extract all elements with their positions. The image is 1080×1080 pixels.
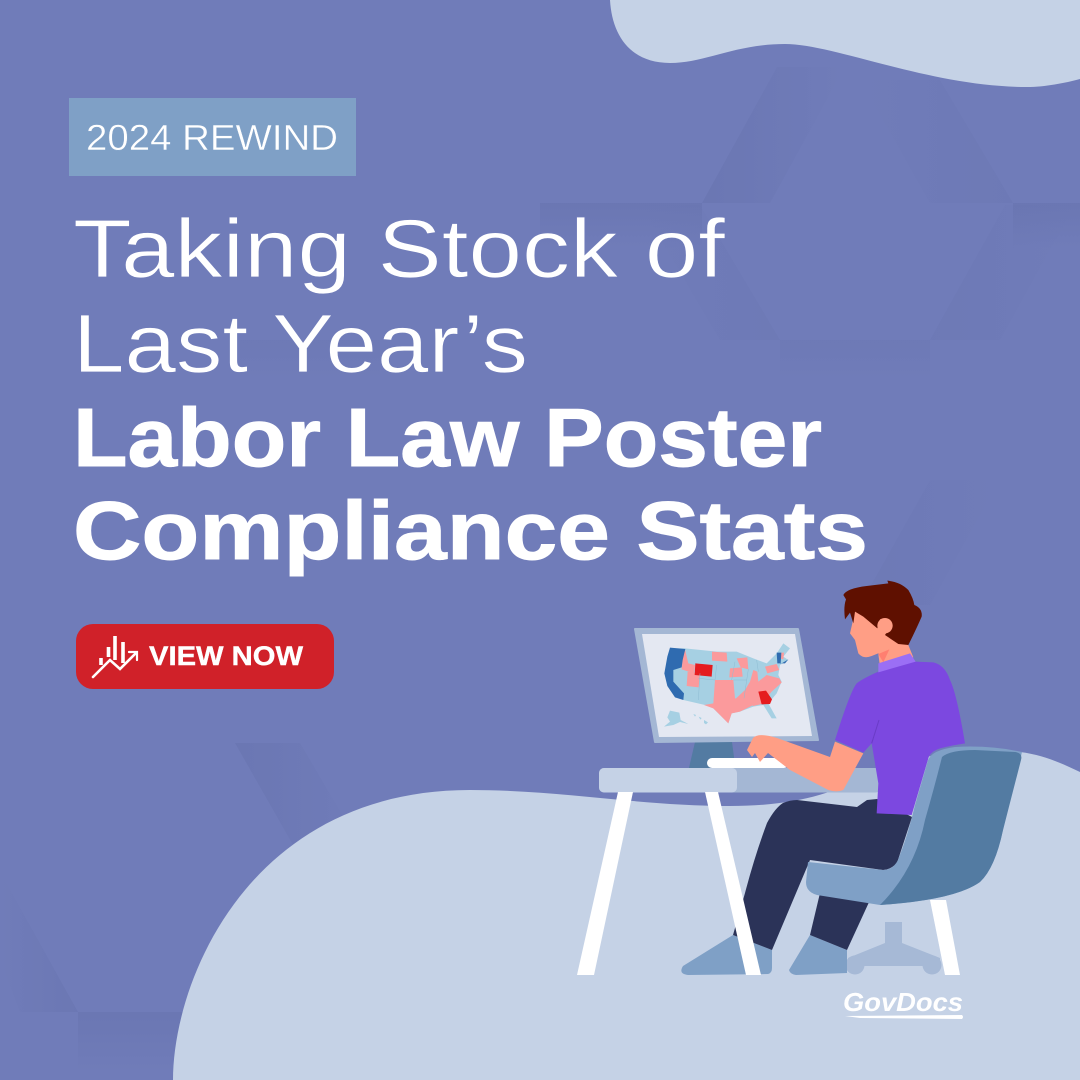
icon: rising bar chart — [93, 636, 137, 677]
illustration: person at desk — [577, 581, 1022, 975]
bottom blob — [173, 751, 1080, 1080]
person upper body — [747, 581, 965, 815]
left desk leg — [577, 792, 633, 975]
tag: 2024 rewind — [69, 98, 356, 176]
logo: GovDocs: GovDocs — [843, 987, 963, 1017]
neck — [878, 635, 913, 667]
arm and hand — [747, 735, 863, 791]
hair — [843, 581, 922, 645]
right desk leg — [705, 792, 761, 975]
desk — [599, 768, 881, 792]
chair — [806, 747, 1022, 905]
title: Last Year’s — [73, 297, 528, 390]
title: Labor Law Poster — [73, 391, 822, 484]
top right blob — [610, 0, 1080, 87]
back desk leg — [930, 900, 960, 975]
mainland states base — [665, 643, 790, 723]
dark blue states — [664, 648, 788, 700]
button: view now — [76, 624, 334, 689]
title: Taking Stock of — [73, 202, 726, 295]
monitor — [635, 629, 818, 742]
tag: 2024 rewind: 2024 REWIND — [86, 117, 338, 158]
chair base — [846, 922, 942, 974]
title: Compliance Stats — [73, 484, 868, 577]
keyboard — [707, 758, 789, 768]
alaska and hawaii — [664, 711, 708, 727]
shoes — [681, 935, 847, 975]
neck shadow — [878, 649, 889, 662]
torso — [835, 662, 965, 815]
shirt fold — [872, 720, 879, 743]
title — [73, 202, 868, 577]
ear — [877, 618, 893, 633]
collar — [878, 653, 916, 672]
red states — [695, 663, 772, 704]
pink states — [682, 649, 784, 723]
near leg and thigh — [733, 799, 912, 950]
state borders — [698, 660, 758, 700]
far leg — [810, 893, 870, 950]
US map — [664, 643, 790, 727]
face — [850, 610, 895, 657]
button: view now: VIEW NOW — [149, 641, 303, 671]
monitor stand — [688, 742, 736, 772]
